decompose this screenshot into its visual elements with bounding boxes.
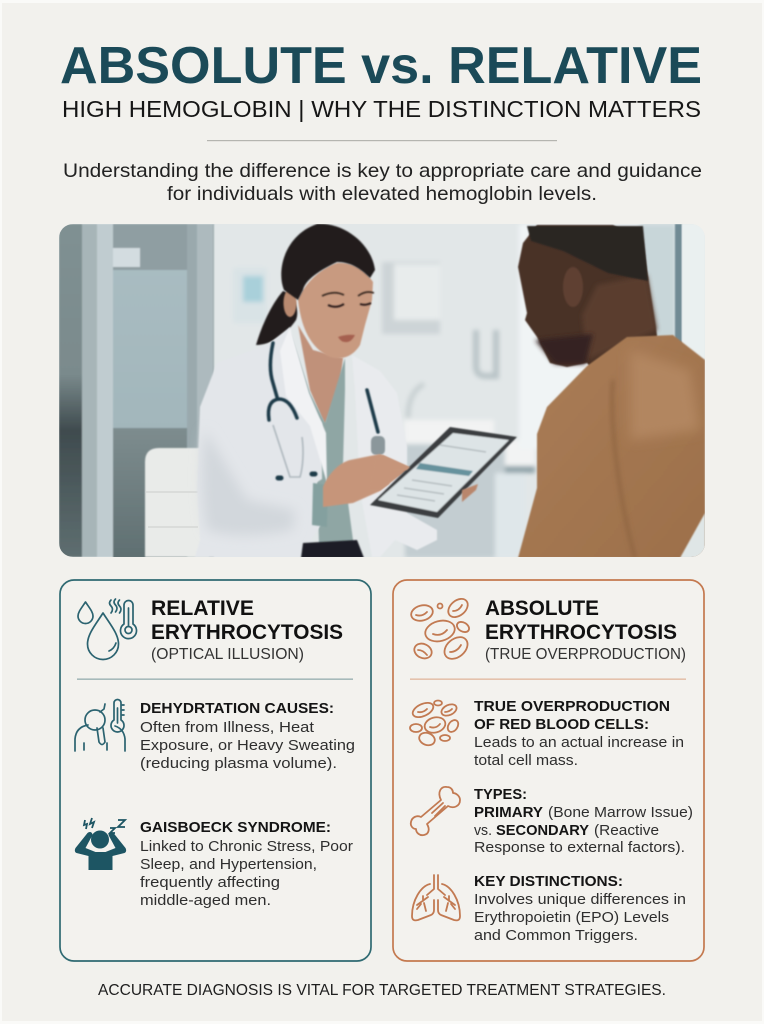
doctor head [298, 263, 373, 358]
heading: relative erythrocytosis: RELATIVE [151, 596, 254, 620]
heading: absolute erythrocytosis [485, 596, 686, 663]
heading: relative erythrocytosis: ERYTHROCYTOSIS [151, 620, 343, 644]
text: key distinctions: Involves unique differences in [474, 892, 686, 908]
text: true overproduction: Leads to an actual increase in [474, 735, 684, 751]
patient head [518, 225, 657, 373]
footer statement: ACCURATE DIAGNOSIS IS VITAL FOR TARGETED TREATMENT STRATEGIES. [98, 982, 666, 999]
icon: bone [411, 787, 460, 835]
icon: lungs [412, 875, 460, 920]
text: gaisboeck syndrome: Linked to Chronic Stress, Poor [140, 839, 353, 855]
doctor pants [301, 540, 364, 558]
patient sweater [518, 335, 705, 558]
panel: relative erythrocytosis [60, 580, 371, 961]
text: true overproduction: total cell mass. [474, 753, 578, 769]
text: true overproduction [474, 699, 684, 769]
panel: absolute erythrocytosis [393, 580, 704, 961]
doctor shirt [293, 338, 354, 543]
text: key distinctions [474, 874, 686, 944]
photo: doctor reviewing tablet with patient [59, 224, 705, 573]
intro text: Understanding the difference is key to appropriate care and guidance [63, 160, 702, 182]
glass door background [59, 224, 214, 558]
icon: person drinking with thermometer [75, 700, 125, 751]
text: gaisboeck syndrome: frequently affecting [140, 875, 280, 891]
doctor coat right [402, 444, 438, 550]
doctor neck and chest [298, 325, 343, 425]
doctor coat left [195, 327, 322, 557]
text: types: PRIMARY [474, 805, 543, 821]
text: types: (Reactive [594, 823, 659, 839]
doctor eyes and mouth [322, 292, 374, 342]
text: dehydration causes: Exposure, or Heavy Sweating [140, 738, 355, 754]
text: dehydration causes: Often from Illness, Heat [140, 720, 314, 736]
chair [145, 448, 209, 557]
text: dehydration causes [140, 701, 355, 772]
text: types: (Bone Marrow Issue) [548, 805, 693, 821]
heading: absolute erythrocytosis: ABSOLUTE [485, 596, 599, 620]
subtitle: HIGH HEMOGLOBIN | WHY THE DISTINCTION MATTERS [62, 96, 701, 122]
text: key distinctions: KEY DISTINCTIONS: [474, 874, 623, 890]
text: types: vs. [474, 823, 492, 839]
heading: relative erythrocytosis [151, 596, 343, 663]
text: types: SECONDARY [496, 823, 589, 839]
text: types [474, 787, 693, 856]
stethoscope [268, 343, 378, 478]
text: gaisboeck syndrome: GAISBOECK SYNDROME: [140, 820, 331, 836]
intro text [63, 160, 702, 205]
text: gaisboeck syndrome: Sleep, and Hypertension, [140, 857, 317, 873]
text: gaisboeck syndrome: middle-aged men. [140, 893, 271, 909]
text: dehydration causes: (reducing plasma volume). [140, 756, 337, 772]
heading: absolute erythrocytosis: ERYTHROCYTOSIS [485, 620, 677, 644]
doctor hand [323, 454, 410, 507]
text: types: TYPES: [474, 787, 527, 803]
doctor cuff [312, 483, 328, 527]
title: ABSOLUTE vs. RELATIVE [60, 37, 702, 95]
text: true overproduction: OF RED BLOOD CELLS: [474, 717, 649, 733]
text: key distinctions: Erythropoietin (EPO) Levels [474, 910, 669, 926]
icon: stressed person [75, 818, 126, 870]
tablet [370, 427, 517, 518]
text: dehydration causes: DEHYDRTATION CAUSES: [140, 701, 334, 717]
heading: absolute erythrocytosis: (TRUE OVERPRODUCTION) [485, 646, 686, 663]
text: true overproduction: TRUE OVERPRODUCTION [474, 699, 670, 715]
wall details [233, 224, 676, 558]
doctor fingers over tablet [380, 454, 410, 490]
text: types: Response to external factors). [474, 840, 685, 856]
intro text: for individuals with elevated hemoglobin levels. [167, 183, 597, 205]
heading: relative erythrocytosis: (OPTICAL ILLUSION) [151, 646, 304, 663]
doctor ponytail [256, 291, 297, 345]
icon: red blood cells [409, 595, 472, 663]
icon: water drops and thermometer [78, 599, 136, 660]
doctor hair [281, 224, 375, 300]
icon: cell cluster [410, 700, 460, 747]
text: gaisboeck syndrome [140, 820, 353, 909]
text: key distinctions: and Common Triggers. [474, 928, 638, 944]
